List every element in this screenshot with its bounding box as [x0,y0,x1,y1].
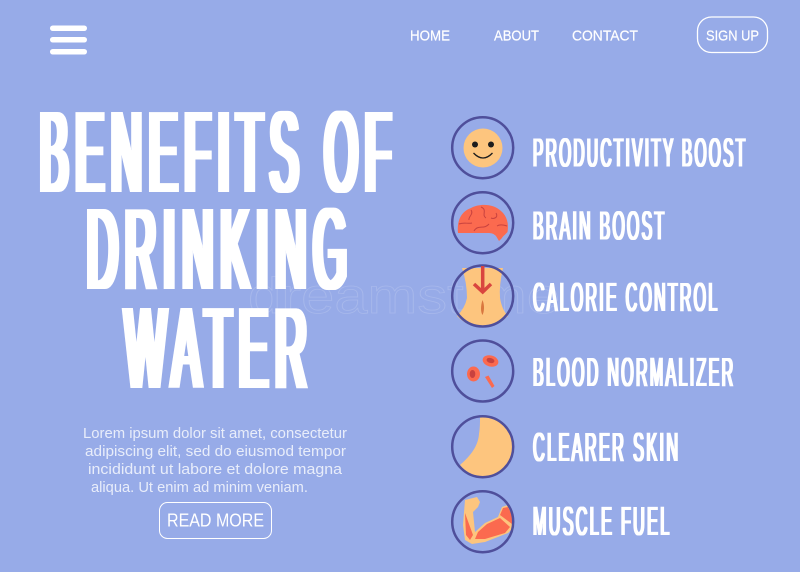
icon: smiley [452,117,513,178]
icon: brain [452,192,513,253]
body text: incididunt ut labore et dolore magna [88,461,343,478]
benefit: clearer skin [452,416,680,477]
benefit: muscle fuel [452,491,672,552]
navigation: HOME [410,28,450,44]
benefit: calorie control [452,266,720,327]
button: read more: READ MORE [167,510,264,530]
benefit: blood normalizer [452,340,736,402]
title: WATER [125,283,314,413]
navigation [410,28,638,44]
icon: flexed arm [452,491,513,552]
body text: adipiscing elit, sed do eiusmod tempor [85,443,346,460]
text: dreamstime [248,268,560,324]
title [40,87,398,413]
navigation: CONTACT [572,28,638,44]
icon: belly with arrow [452,266,513,327]
body text [83,425,347,496]
body text: aliqua. Ut enim ad minim veniam. [91,479,308,496]
button: sign up: SIGN UP [706,28,759,44]
icon: hamburger menu [50,26,87,54]
benefit: productivity boost [452,117,748,178]
text: DRINKING [87,184,354,314]
button: read more [160,502,272,538]
button: sign up [698,17,768,52]
navigation: ABOUT [494,28,539,44]
icon: blood cells [452,340,513,402]
benefit: brain boost [452,192,666,253]
icon: skin [452,416,514,477]
body text: Lorem ipsum dolor sit amet, consectetur [83,425,347,442]
